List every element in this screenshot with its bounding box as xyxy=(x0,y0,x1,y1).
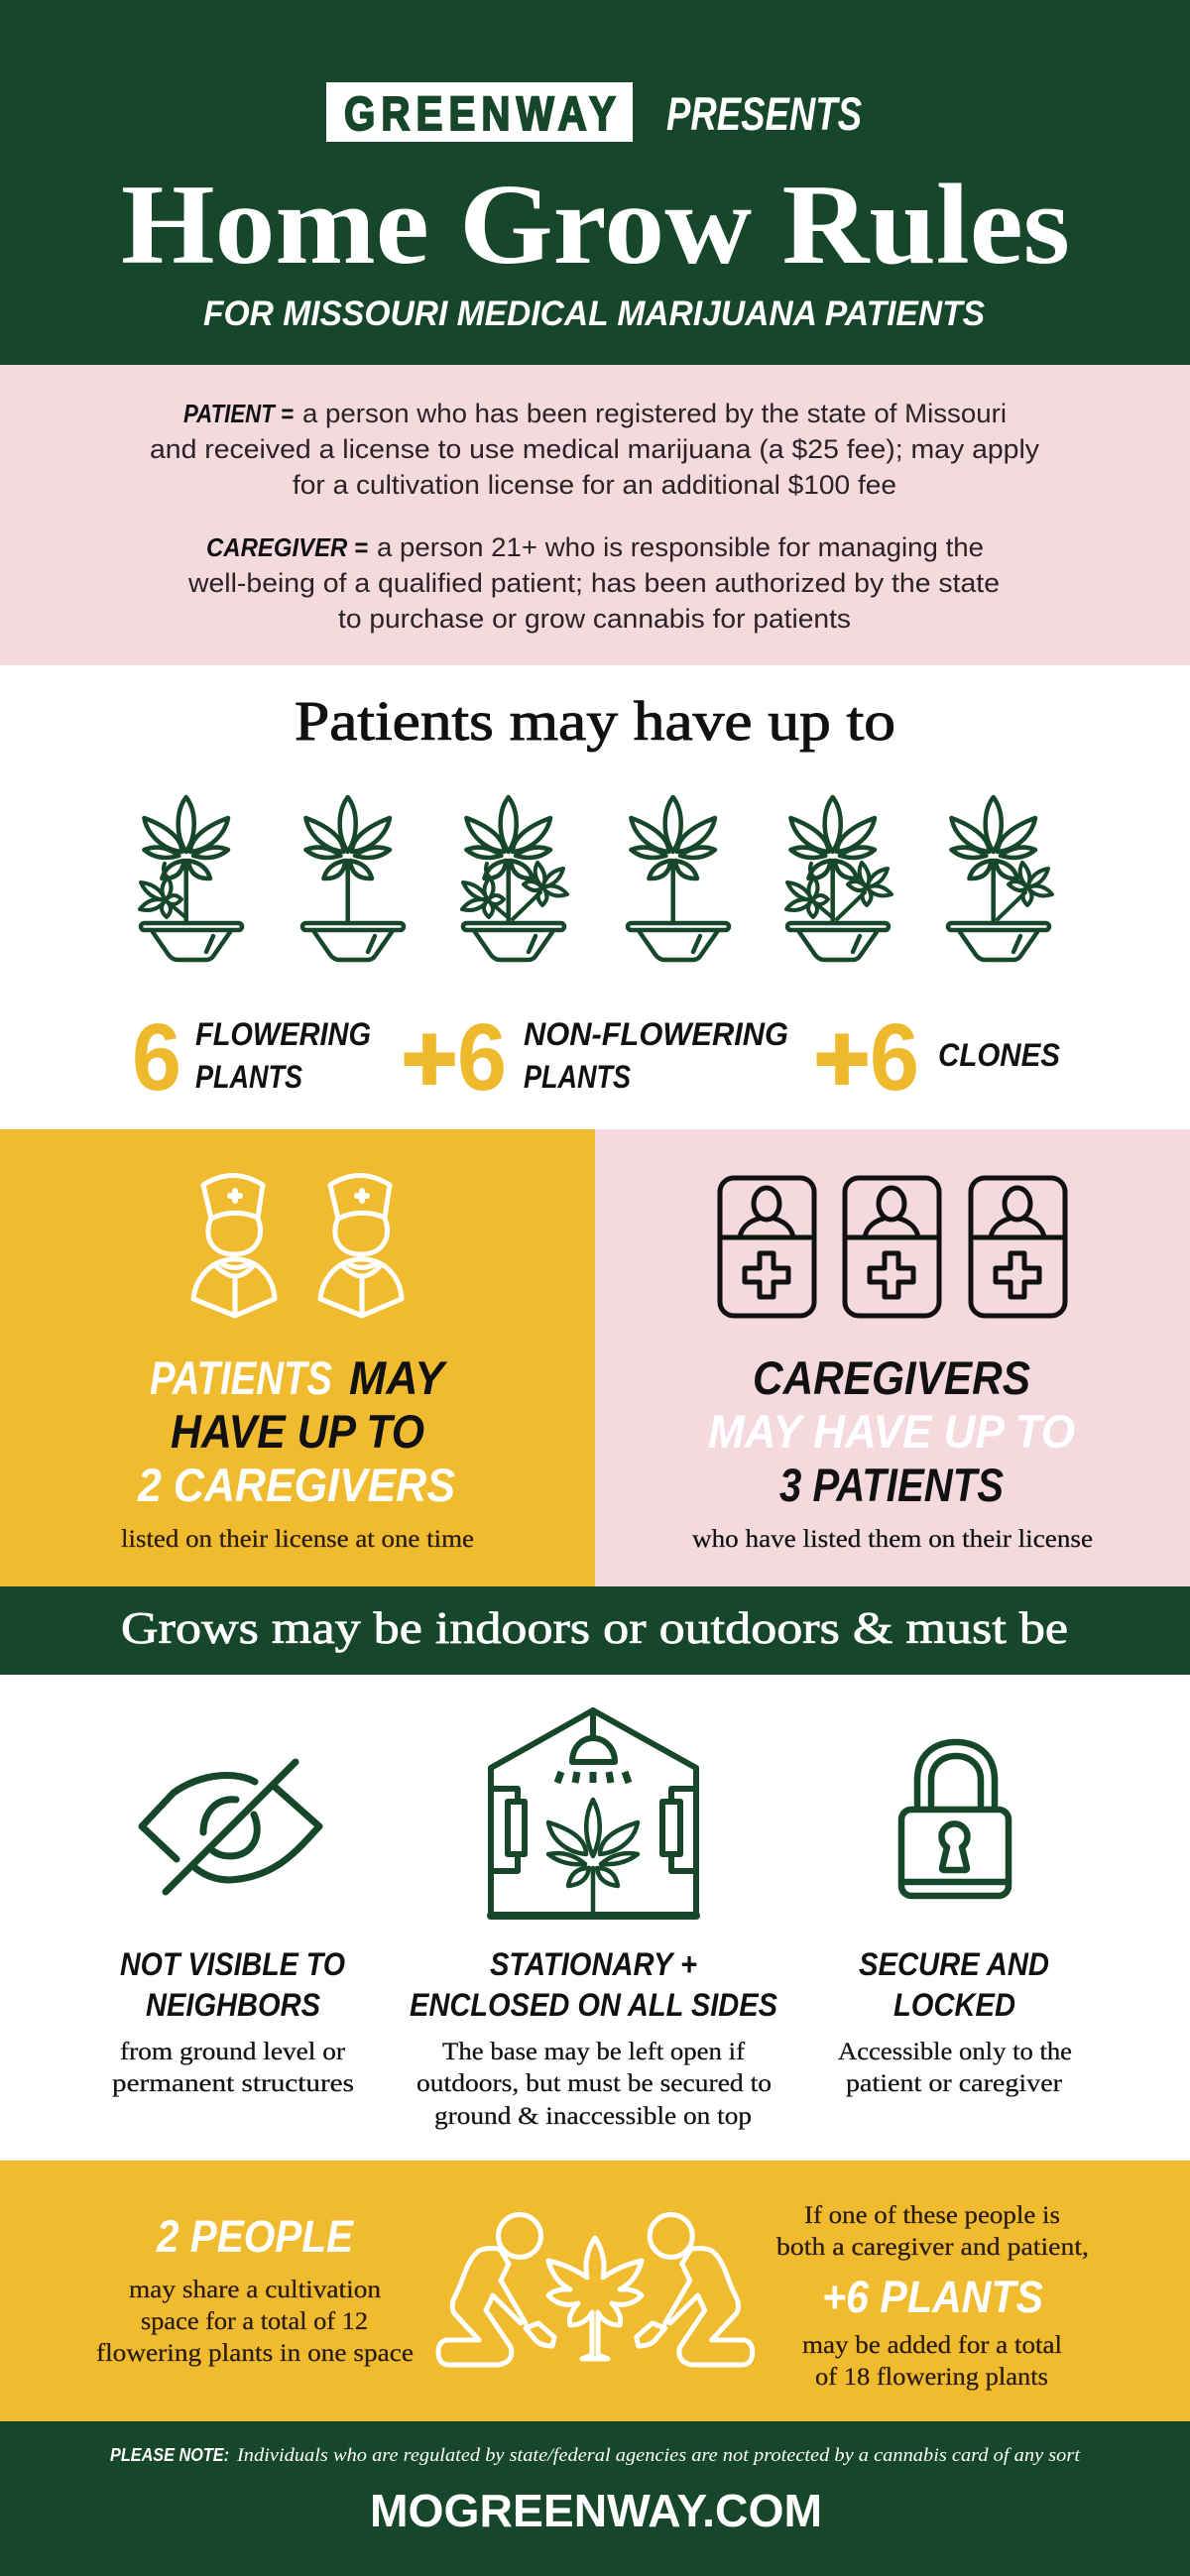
website: MOGREENWAY.COM xyxy=(370,2485,822,2536)
column: secure and locked xyxy=(838,1946,1072,2097)
please note: PLEASE NOTE: xyxy=(110,2445,229,2465)
icon: plant 1 xyxy=(140,797,242,960)
column: not visible to neighbors: NEIGHBORS xyxy=(146,1987,321,2023)
patient definition: a person who has been registered by the state of Missouri xyxy=(302,399,1007,428)
please note: Individuals who are regulated by state/federal agencies are not protected by a cannabis card of any sort xyxy=(236,2445,1081,2466)
count: flowering plants: FLOWERING xyxy=(195,1016,371,1052)
count: non-flowering plants: 6 xyxy=(457,1004,507,1111)
footer panel xyxy=(0,2421,1190,2576)
patient definition xyxy=(150,399,1040,500)
column: stationary and enclosed: ground & inaccessible on top xyxy=(434,2103,752,2130)
count: clones: + xyxy=(814,1005,870,1112)
icon: plant 6 xyxy=(948,797,1052,960)
heading: patients may have up to 2 caregivers: PATIENTS xyxy=(150,1351,332,1404)
caregiver definition: well-being of a qualified patient; has been authorized by the state xyxy=(187,568,1000,598)
text: plus 6 plants: of 18 flowering plants xyxy=(815,2364,1048,2391)
column: stationary and enclosed: outdoors, but must be secured to xyxy=(416,2070,772,2097)
icon row: six plants xyxy=(140,797,1052,960)
text: 2 people: space for a total of 12 xyxy=(141,2308,368,2335)
text: plus 6 plants: may be added for a total xyxy=(802,2332,1062,2359)
count: clones xyxy=(814,1004,1061,1112)
subtitle: FOR MISSOURI MEDICAL MARIJUANA PATIENTS xyxy=(203,294,985,333)
column: not visible to neighbors: NOT VISIBLE TO xyxy=(120,1946,345,1982)
text: plus 6 plants: +6 PLANTS xyxy=(822,2272,1043,2322)
column: stationary and enclosed: STATIONARY + xyxy=(490,1946,697,1982)
column: secure and locked: SECURE AND xyxy=(859,1946,1049,1982)
banner: grows may be indoors or outdoors xyxy=(0,1586,1190,1675)
panel: definitions xyxy=(0,365,1190,665)
note: listed on license: listed on their license at one time xyxy=(121,1526,474,1553)
panel: shared cultivation xyxy=(0,2161,1190,2421)
icon: crossed-out eye xyxy=(142,1762,319,1892)
icon: plant 3 xyxy=(462,797,567,960)
column: secure and locked: Accessible only to the xyxy=(838,2039,1072,2065)
heading: patients may have up to 2 caregivers xyxy=(137,1351,455,1511)
plant counts xyxy=(132,1004,1061,1112)
icon: two gardeners and plant xyxy=(438,2215,753,2365)
column: stationary and enclosed: ENCLOSED ON ALL SIDES xyxy=(410,1987,778,2023)
text: 2 people: flowering plants in one space xyxy=(96,2340,414,2367)
icon: plant 4 xyxy=(628,797,729,960)
column: stationary and enclosed: The base may be left open if xyxy=(442,2039,746,2065)
heading: patients may have up to 2 caregivers: MAY xyxy=(349,1351,447,1404)
text: plus 6 plants: If one of these people is xyxy=(804,2202,1060,2229)
patient definition: and received a license to use medical marijuana (a $25 fee); may apply xyxy=(150,434,1040,464)
count: non-flowering plants: PLANTS xyxy=(524,1059,632,1095)
patient definition: for a cultivation license for an additional $100 fee xyxy=(293,470,896,500)
presents label: PRESENTS xyxy=(666,87,862,140)
caregiver definition xyxy=(187,532,1000,634)
heading: caregivers may have up to 3 patients: 3 PATIENTS xyxy=(779,1459,1004,1511)
count: non-flowering plants xyxy=(402,1004,788,1112)
text: plus 6 plants: both a caregiver and patient, xyxy=(776,2234,1089,2261)
text: plus 6 plants xyxy=(776,2202,1089,2391)
heading: caregivers may have up to 3 patients: MAY HAVE UP TO xyxy=(708,1405,1075,1458)
logo box: GREENWAY xyxy=(344,88,616,141)
heading: caregivers may have up to 3 patients: CAREGIVERS xyxy=(753,1351,1030,1404)
column: not visible to neighbors xyxy=(112,1946,354,2097)
column: secure and locked: patient or caregiver xyxy=(846,2070,1063,2097)
count: non-flowering plants: NON-FLOWERING xyxy=(524,1016,788,1052)
heading: patients may have up to: Patients may have up to xyxy=(295,691,895,753)
caregiver definition: to purchase or grow cannabis for patients xyxy=(338,604,851,634)
patient definition: PATIENT = xyxy=(183,399,294,428)
column: not visible to neighbors: permanent structures xyxy=(112,2070,354,2097)
title: Home Grow Rules xyxy=(121,162,1070,289)
text: 2 people: 2 PEOPLE xyxy=(156,2211,355,2262)
heading: caregivers may have up to 3 patients xyxy=(708,1351,1075,1511)
note: who have listed them: who have listed them on their license xyxy=(692,1526,1093,1553)
text: 2 people xyxy=(96,2211,414,2367)
header panel xyxy=(0,0,1190,365)
count: clones: CLONES xyxy=(938,1037,1061,1073)
caregiver definition: a person 21+ who is responsible for managing the xyxy=(377,532,984,562)
panel: caregivers and patients xyxy=(595,1129,1190,1586)
caregiver definition: CAREGIVER = xyxy=(206,532,368,562)
heading: patients may have up to 2 caregivers: 2 CAREGIVERS xyxy=(137,1459,455,1511)
count: flowering plants: 6 xyxy=(132,1004,181,1111)
heading: patients may have up to 2 caregivers: HAVE UP TO xyxy=(171,1405,424,1458)
icon: padlock xyxy=(901,1742,1009,1896)
count: non-flowering plants: + xyxy=(402,1005,457,1112)
count: flowering plants xyxy=(132,1004,371,1111)
icon: plant 5 xyxy=(786,797,892,960)
column: not visible to neighbors: from ground level or xyxy=(120,2039,346,2065)
column: secure and locked: LOCKED xyxy=(893,1987,1015,2023)
panel: patients and caregivers xyxy=(0,1129,595,1586)
icon: greenhouse xyxy=(491,1710,696,1917)
count: flowering plants: PLANTS xyxy=(195,1059,303,1095)
column: stationary and enclosed xyxy=(410,1946,778,2130)
icon: nurses xyxy=(193,1176,402,1316)
panel: grow requirements xyxy=(0,1675,1190,2161)
text: 2 people: may share a cultivation xyxy=(129,2277,382,2303)
banner: grows may be indoors or outdoors: Grows may be indoors or outdoors & must be xyxy=(121,1602,1068,1653)
icon: plant 2 xyxy=(302,797,404,960)
count: clones: 6 xyxy=(870,1004,919,1111)
icon: patient cards xyxy=(720,1178,1065,1316)
